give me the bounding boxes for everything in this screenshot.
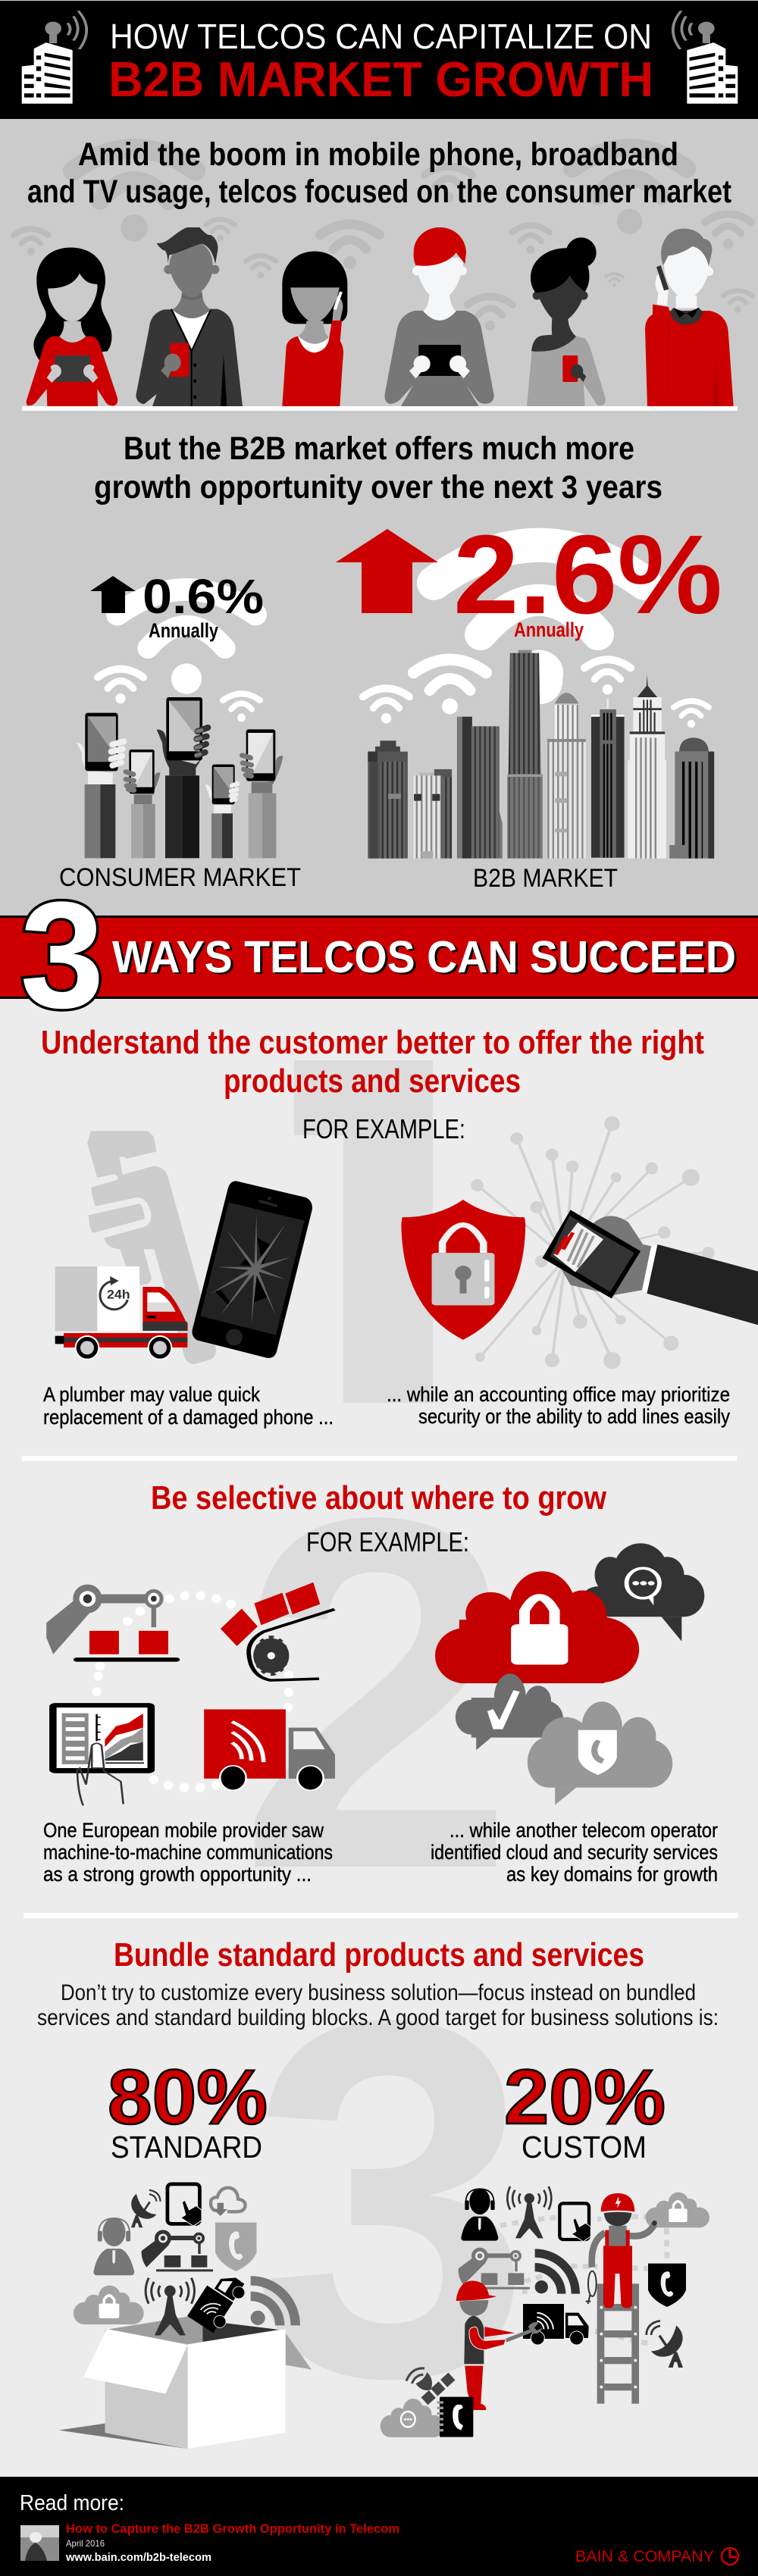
worker with wrench [456, 2280, 542, 2410]
header banner [0, 1, 758, 119]
icon: connected truck [523, 2304, 589, 2345]
people using devices, right group [385, 227, 734, 406]
icon: red security shield with lock [401, 1200, 525, 1340]
subheading: B2B opportunity: growth opportunity over the next 3 years [94, 469, 662, 505]
stat: 80 percent standard: 80% [108, 2054, 268, 2140]
for example label: FOR EXAMPLE: [306, 1526, 469, 1557]
icon: antenna tower [507, 2186, 551, 2238]
building 8 [669, 737, 714, 859]
url: www.bain.com/b2b-telecom [65, 2551, 211, 2564]
icon: cloud with chat [381, 2399, 444, 2437]
article title: How to Capture the B2B Growth Opportunity in Telecom [66, 2521, 399, 2536]
building 5 [547, 693, 586, 859]
title line 2: B2B MARKET GROWTH [108, 52, 653, 107]
icon: cloud lock [74, 2286, 144, 2324]
caption: plumber [43, 1383, 334, 1429]
illustration: wrench, truck and broken phone [55, 1131, 312, 1364]
white ground line [22, 406, 738, 411]
icon: headset agent [461, 2188, 498, 2241]
icon: city skyline [368, 650, 714, 859]
building 6 [591, 699, 625, 858]
subheading: B2B opportunity: But the B2B market offers much more [124, 430, 634, 467]
heading: Be selective about where to grow [151, 1479, 607, 1516]
icon: tablet touch [168, 2184, 202, 2226]
caption: European mobile provider: as a strong growth opportunity ... [43, 1863, 312, 1886]
stat: 0.6 percent: 0.6% [143, 569, 264, 624]
panel: way 2 be selective [43, 1479, 718, 1886]
icon: network lines [472, 1117, 713, 1368]
caption: plumber: replacement of a damaged phone ... [43, 1406, 334, 1429]
background: light lower section [0, 999, 758, 2477]
arrow: B2B growth [336, 529, 438, 613]
icon: signal [251, 2280, 296, 2325]
stat: 20 percent custom: 20% [504, 2054, 666, 2140]
person 2: man in cardigan [136, 227, 243, 406]
panel: consumer market [59, 569, 301, 892]
illustration: open box with icons [58, 2184, 312, 2449]
person 4: red-haired person with tablet [385, 227, 494, 406]
panel: way 1 understand the customer [41, 1024, 758, 1429]
label: consumer market: CONSUMER MARKET [59, 863, 301, 892]
stat: 80 percent standard: STANDARD [111, 2130, 262, 2164]
title line 1: HOW TELCOS CAN CAPITALIZE ON [110, 17, 652, 56]
stat: 20 percent custom: CUSTOM [522, 2130, 647, 2164]
white wifi behind 2.6% [434, 545, 644, 704]
dashed connector lines [500, 2217, 667, 2344]
icon: phone shield [648, 2264, 686, 2307]
caption: European mobile provider: machine-to-machine communications [43, 1841, 333, 1864]
icon group: clouds [435, 1543, 704, 1805]
icon: satellite [406, 2368, 453, 2401]
worker on ladder [586, 2193, 657, 2308]
icon: box front [83, 2329, 286, 2449]
caption: European mobile provider: One European mobile provider saw [43, 1819, 324, 1842]
background numeral 3: 3 [250, 1914, 532, 2482]
icon: connected truck [204, 1709, 335, 1790]
icon: light grey cloud with phone shield [528, 1701, 672, 1805]
icon: broken smartphone [192, 1181, 312, 1358]
icon: left telecom building [22, 11, 86, 104]
label: annually: Annually [149, 619, 218, 642]
icon: dark chat cloud [580, 1543, 704, 1642]
subheading: B2B opportunity [94, 430, 662, 505]
icon: hand holding phone [543, 1210, 758, 1325]
panel: way 3 bundle [37, 1936, 719, 2449]
intro text: Amid the boom in mobile phone, broadband [78, 136, 678, 173]
paragraph [37, 1980, 719, 2030]
building 1 [368, 740, 408, 859]
icon: satellite dish [647, 2321, 683, 2368]
icon: wifi signals over city [363, 659, 709, 728]
arrow: consumer growth [90, 576, 136, 613]
icon: right telecom building [673, 11, 738, 104]
icon: box shadow and back [58, 2317, 312, 2449]
person 6: man on phone in red sweater [645, 229, 734, 406]
caption: another telecom operator: ... while another telecom operator [449, 1819, 718, 1842]
building 7 [628, 675, 666, 859]
icon: red cloud with lock [435, 1571, 639, 1683]
white wifi behind 0.6% [117, 590, 255, 694]
heading: Bundle standard products and services [114, 1936, 644, 1973]
icon: cloud lock [646, 2193, 709, 2227]
caption: another telecom operator [431, 1819, 718, 1886]
icon: 24h delivery truck [55, 1266, 188, 1360]
icon: conveyor with gear [221, 1582, 334, 1680]
icon: small wifi signals [98, 669, 260, 721]
heading [41, 1024, 704, 1100]
icon: tumbling truck [187, 2267, 249, 2336]
big number 3: 3 [20, 871, 105, 1040]
heading: products and services [224, 1063, 521, 1100]
caption: accounting office [387, 1383, 730, 1428]
caption: European mobile provider [43, 1819, 333, 1886]
read more label: Read more: [20, 2491, 124, 2515]
icon: ladder [597, 2283, 639, 2404]
icon: cloud download [211, 2188, 246, 2216]
banner heading: WAYS TELCOS CAN SUCCEED [112, 932, 736, 982]
background numeral 2: 2 [237, 1414, 516, 1973]
icon: antenna tower [146, 2278, 194, 2336]
caption: plumber: A plumber may value quick [43, 1383, 260, 1406]
person 1: woman with tablet [27, 248, 117, 406]
background wifi pattern behind people [14, 148, 753, 330]
building 2 [412, 769, 452, 859]
label: B2B market: B2B MARKET [473, 864, 618, 893]
icon: signal [535, 2253, 575, 2294]
label: annually: Annually [514, 618, 584, 641]
date: April 2016 [66, 2538, 105, 2549]
person 3: woman on phone [282, 252, 347, 406]
caption: another telecom operator: identified cloud and security services [431, 1841, 718, 1864]
building 4 [507, 650, 543, 859]
icon: 24h delivery truck: 24h [107, 1287, 130, 1301]
icon: brand logo [722, 2548, 738, 2565]
icon: robot arm [46, 1585, 180, 1662]
icon: phone directory [437, 2397, 473, 2437]
icon: robot arm [459, 2248, 530, 2290]
icon: phone shield [215, 2223, 256, 2271]
intro text [27, 136, 731, 210]
person 5: woman with hair bun and phone [527, 237, 606, 406]
icon: hands holding phones [77, 697, 283, 858]
for example label: FOR EXAMPLE: [302, 1113, 465, 1144]
building 3 [457, 717, 503, 859]
illustration: workers building custom solution [381, 2186, 709, 2437]
stat: 2.6 percent: 2.6% [453, 512, 722, 637]
icon: grey cloud with check [456, 1673, 563, 1750]
caption: another telecom operator: as key domains for growth [506, 1863, 718, 1886]
icon: tablet with chart and hand [49, 1703, 155, 1805]
icon: robot arm [142, 2230, 213, 2271]
panel: B2B market [336, 512, 722, 893]
white dotted loop [92, 1592, 293, 1792]
icon: satellite dish [131, 2190, 161, 2227]
banner: 3 ways telcos can succeed [0, 871, 758, 1040]
icon: headset agent [93, 2218, 134, 2275]
background numeral 1 [294, 1060, 433, 1403]
people using devices, left group [27, 227, 347, 406]
background: grey top section [0, 0, 758, 917]
footer [0, 2477, 758, 2576]
icon: wrench [87, 1131, 216, 1364]
icon: tablet touch [559, 2203, 590, 2242]
brand name: BAIN & COMPANY [575, 2548, 714, 2565]
icon group: machine-to-machine loop [46, 1582, 335, 1805]
thumbnail image placeholder [20, 2525, 59, 2561]
